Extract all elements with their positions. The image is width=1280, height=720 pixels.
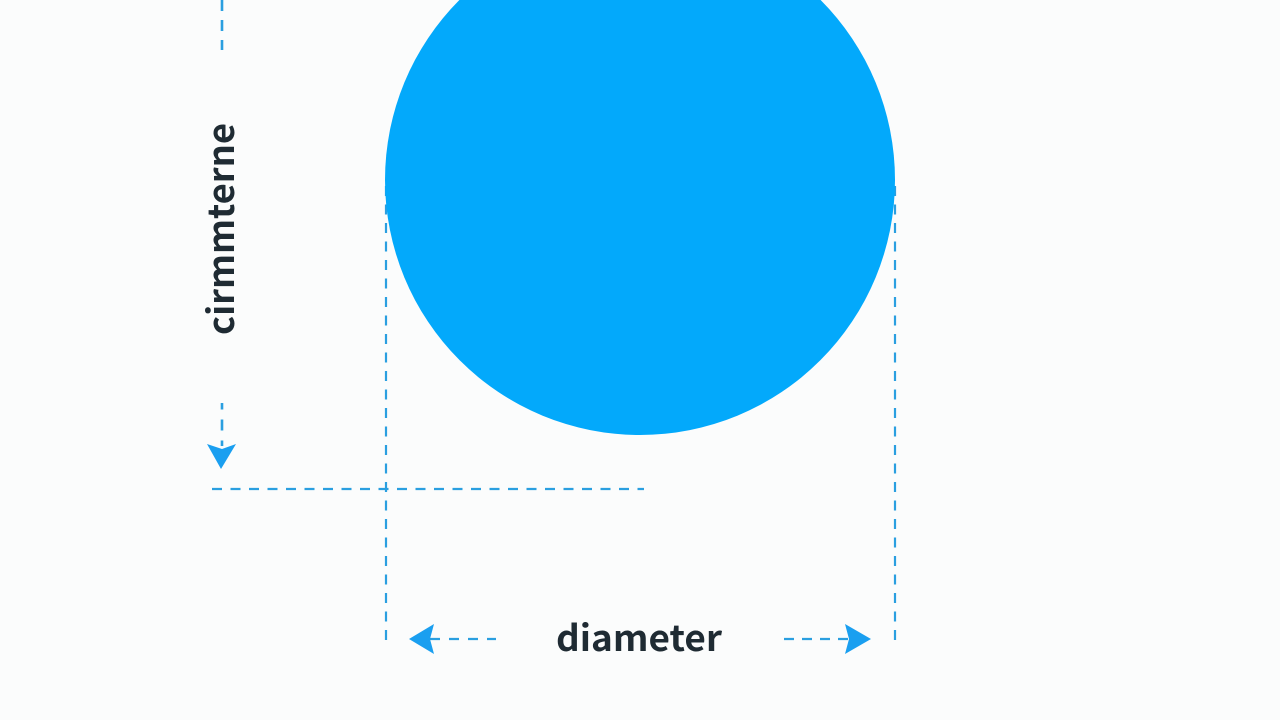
- circumference label: cirmmterne: [193, 123, 245, 335]
- diameter right arrow: [784, 624, 871, 654]
- circumference top dashed line: [221, 0, 223, 50]
- diameter label: diameter: [556, 610, 722, 662]
- circumference down arrow: [207, 403, 236, 469]
- blue circle: [385, 0, 895, 435]
- left vertical dashed guide: [385, 186, 387, 642]
- diameter left arrow: [409, 624, 496, 654]
- right vertical dashed guide: [894, 186, 896, 642]
- horizontal dashed radius line: [212, 488, 644, 490]
